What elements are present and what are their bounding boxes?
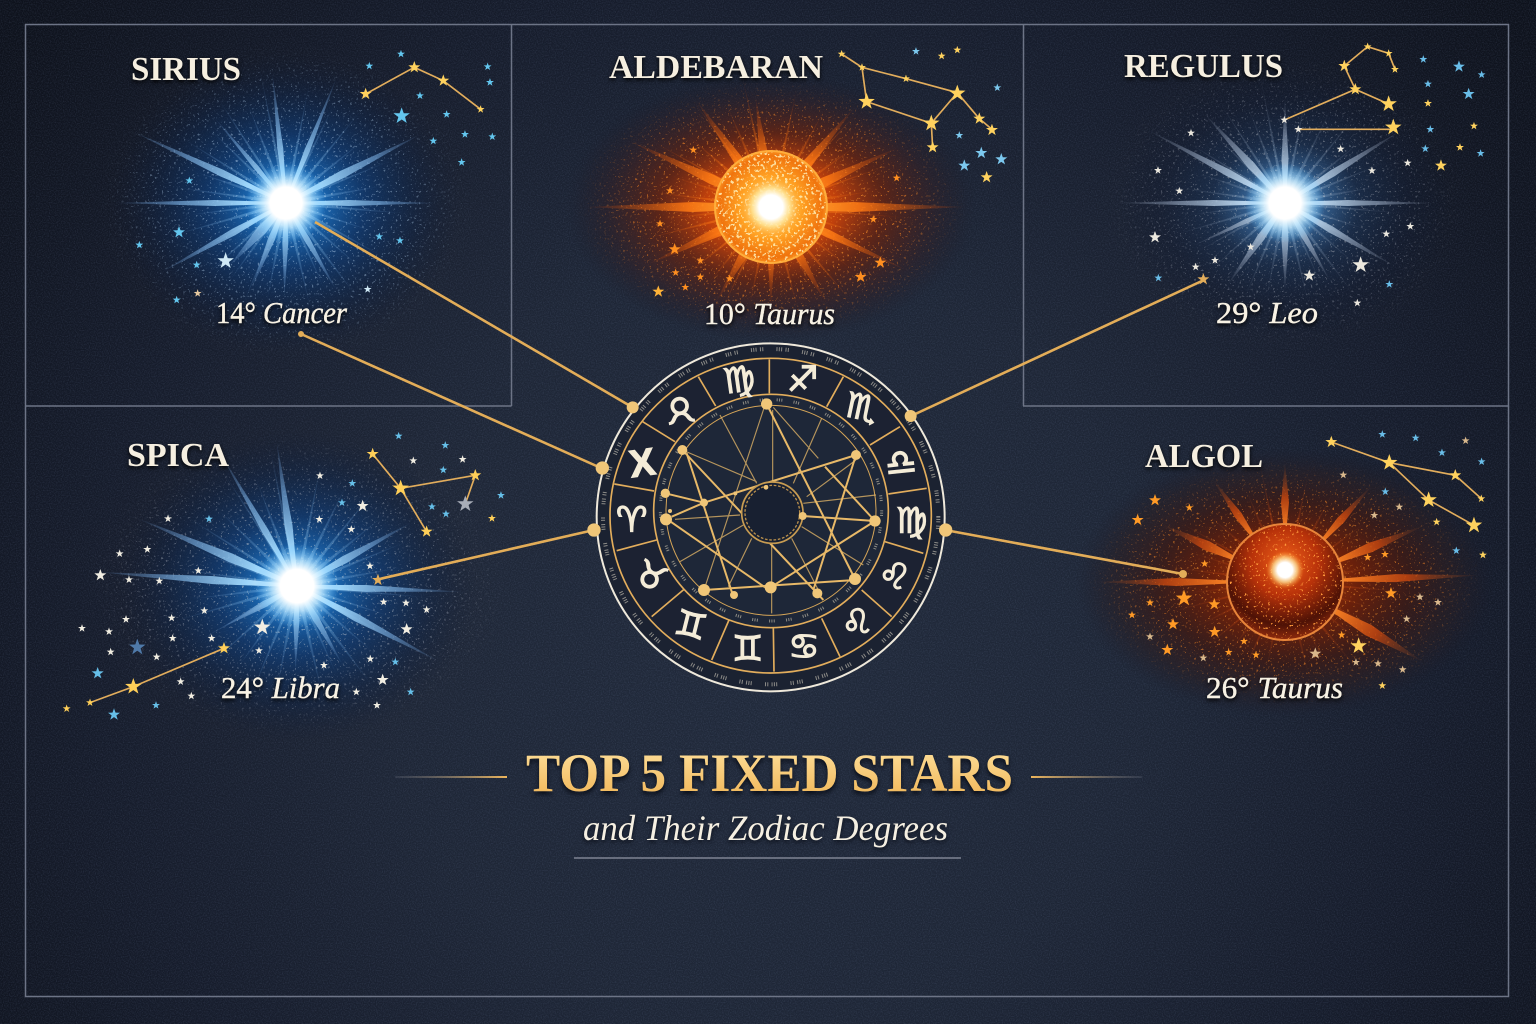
panel: Regulus xyxy=(1100,42,1486,353)
zodiac signs: ♏︎ xyxy=(842,386,881,431)
title: TOP 5 FIXED STARS xyxy=(526,743,1013,803)
zodiac signs: ♋︎ xyxy=(788,627,820,667)
degree: Spica: 24° Libra xyxy=(221,670,340,705)
star burst: Spica xyxy=(82,431,512,741)
zodiac signs: ♍︎ xyxy=(896,502,927,542)
degree: Aldebaran: 10° Taurus xyxy=(704,296,835,331)
star burst: Algol xyxy=(1075,447,1495,717)
zodiac signs: ♊︎ xyxy=(671,603,711,649)
label: Spica: SPICA xyxy=(127,437,229,474)
constellation: Aldebaran xyxy=(652,46,1007,297)
constellation: Spica xyxy=(63,432,505,720)
zodiac signs: ♈︎ xyxy=(616,501,647,541)
label: Sirius: SIRIUS xyxy=(131,51,241,88)
degree: Algol: 26° Taurus xyxy=(1206,670,1343,705)
constellation: Algol xyxy=(1128,430,1487,689)
connectors from stars to wheel xyxy=(298,222,1204,580)
aspect lines xyxy=(665,404,876,613)
zodiac signs: ♉︎ xyxy=(662,386,698,430)
zodiac signs: ♉︎ xyxy=(628,553,673,602)
chart nodes xyxy=(587,398,952,599)
title block xyxy=(395,743,1142,858)
panel: Spica xyxy=(63,431,512,741)
panel: Sirius xyxy=(96,43,496,363)
degree: Sirius: 14° Cancer xyxy=(216,295,348,330)
star burst: Regulus xyxy=(1100,53,1470,353)
constellation: Sirius xyxy=(135,50,496,303)
panel: Algol xyxy=(1075,430,1495,717)
label: Aldebaran: ALDEBARAN xyxy=(609,49,823,86)
wheel rings xyxy=(597,343,945,691)
zodiac signs: ♍︎ xyxy=(721,359,758,403)
degree: Regulus: 29° Leo xyxy=(1216,295,1318,330)
subtitle rule xyxy=(574,857,961,859)
label: Regulus: REGULUS xyxy=(1124,48,1283,85)
zodiac signs xyxy=(616,359,927,669)
constellation: Regulus xyxy=(1149,42,1486,306)
zodiac signs: ♌︎ xyxy=(872,552,916,600)
sector dividers xyxy=(614,359,927,672)
panel: Aldebaran xyxy=(566,46,1007,342)
zodiac signs: ♌︎ xyxy=(837,601,876,646)
star burst: Aldebaran xyxy=(566,72,976,342)
title rule: left xyxy=(395,776,507,778)
zodiac signs: X xyxy=(627,440,658,486)
zodiac wheel xyxy=(587,343,952,691)
zodiac signs: ♐︎ xyxy=(787,360,818,400)
subtitle: and Their Zodiac Degrees xyxy=(583,808,948,848)
title rule: right xyxy=(1031,776,1142,778)
centre circle xyxy=(742,482,803,543)
zodiac signs: ♊︎ xyxy=(732,629,763,669)
zodiac signs: ♎︎ xyxy=(883,442,918,485)
label: Algol: ALGOL xyxy=(1145,438,1263,475)
star burst: Sirius xyxy=(96,43,476,363)
